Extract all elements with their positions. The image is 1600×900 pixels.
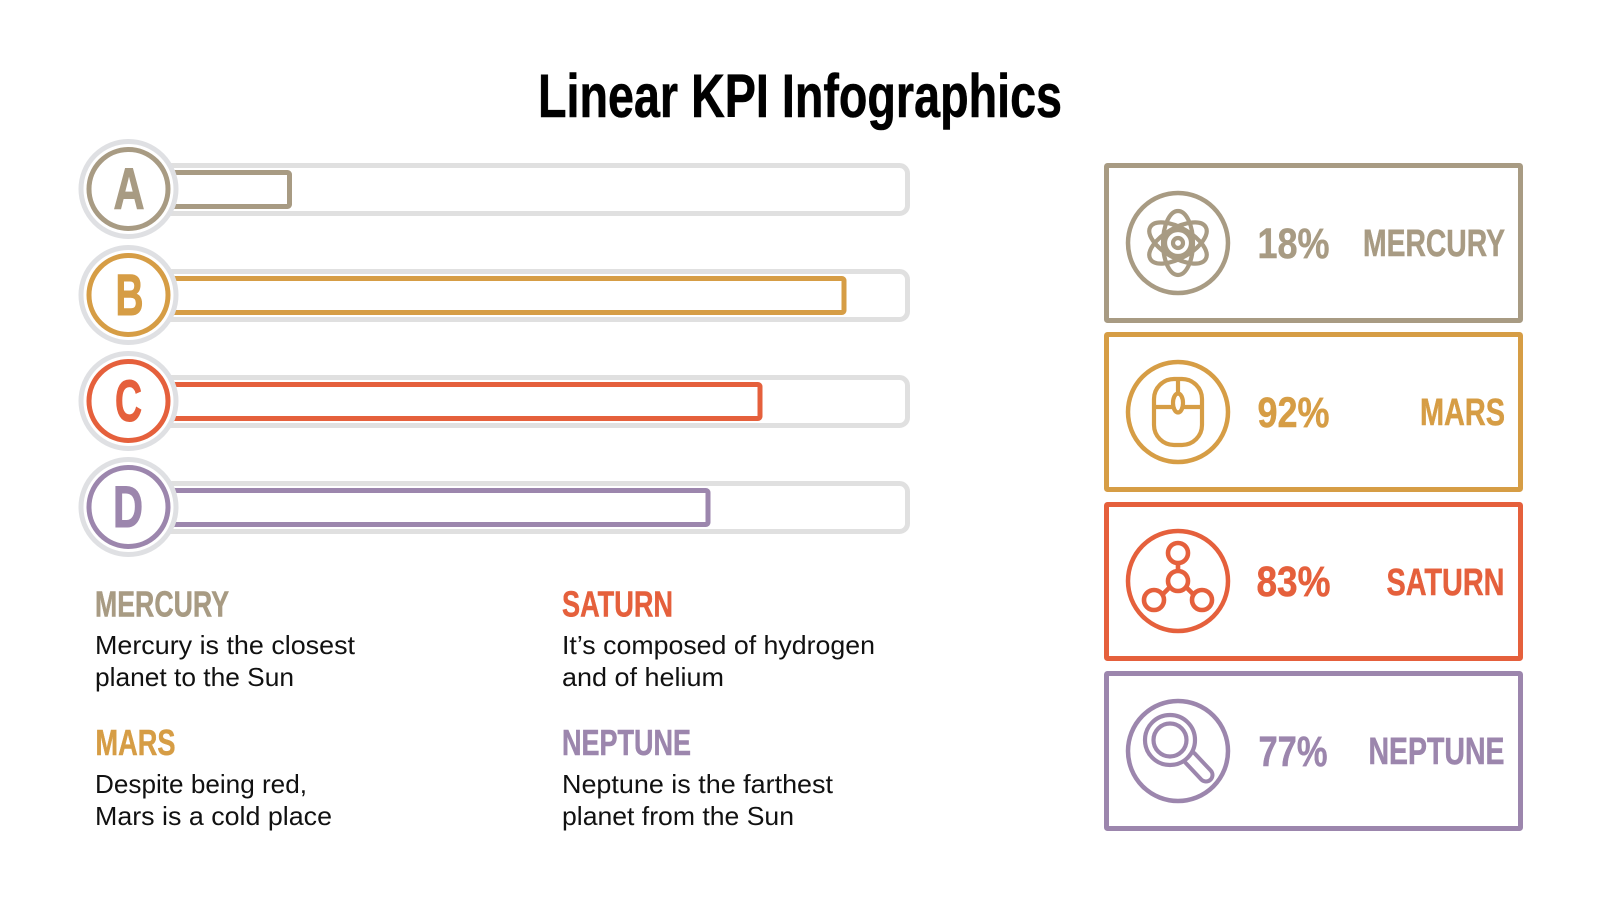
panel: Mars card: 92%: [1258, 389, 1330, 437]
icon: atom: [1143, 211, 1213, 275]
panel: KPI bars: [81, 142, 908, 554]
text block: Mercury: MERCURY: [95, 584, 229, 624]
text block: Neptune: NEPTUNE: [562, 722, 691, 763]
panel: Mars card: MARS: [1420, 392, 1505, 434]
text block: Neptune: [562, 722, 834, 831]
bar A: Mercury: A: [114, 157, 144, 222]
panel: Neptune card: NEPTUNE: [1368, 731, 1504, 773]
bar A: Mercury: [81, 142, 908, 236]
text block: Neptune: Neptune is the farthest: [562, 769, 834, 799]
panel: Neptune card: [1106, 674, 1520, 828]
panel: Neptune card: 77%: [1258, 728, 1328, 776]
text block: Saturn: and of helium: [562, 662, 724, 692]
panel: Mars card: [1106, 334, 1520, 490]
text block: Saturn: It’s composed of hydrogen: [562, 630, 875, 660]
text block: Mars: Mars is a cold place: [95, 801, 332, 831]
bar B: Mars: [81, 248, 908, 342]
panel: Mercury card: 18%: [1258, 220, 1330, 268]
text block: Mercury: planet to the Sun: [95, 662, 294, 692]
bar B: Mars: B: [116, 263, 144, 328]
icon: computer mouse: [1154, 379, 1202, 445]
panel: Saturn card: 83%: [1256, 558, 1330, 606]
panel: Mercury card: [1106, 166, 1520, 320]
bar C: Saturn: [81, 354, 908, 448]
text block: Neptune: planet from the Sun: [562, 801, 794, 831]
panel: Mercury card: MERCURY: [1363, 223, 1505, 265]
text block: Mars: MARS: [96, 722, 176, 763]
text block: Saturn: [562, 584, 875, 692]
bar C: Saturn: C: [115, 369, 142, 434]
text block: Saturn: SATURN: [562, 584, 673, 624]
icon: network nodes: [1144, 543, 1212, 610]
panel: Saturn card: SATURN: [1386, 562, 1504, 604]
bar D: Neptune: D: [113, 475, 143, 540]
icon: magnifying glass: [1145, 715, 1206, 775]
text block: Mercury: [95, 584, 356, 692]
panel: Saturn card: [1106, 504, 1520, 658]
title: Linear KPI Infographics: [538, 62, 1062, 130]
bar D: Neptune: [81, 460, 908, 554]
text block: Mars: Despite being red,: [95, 769, 307, 799]
text block: Mercury: Mercury is the closest: [95, 630, 356, 660]
text block: Mars: [95, 722, 332, 831]
